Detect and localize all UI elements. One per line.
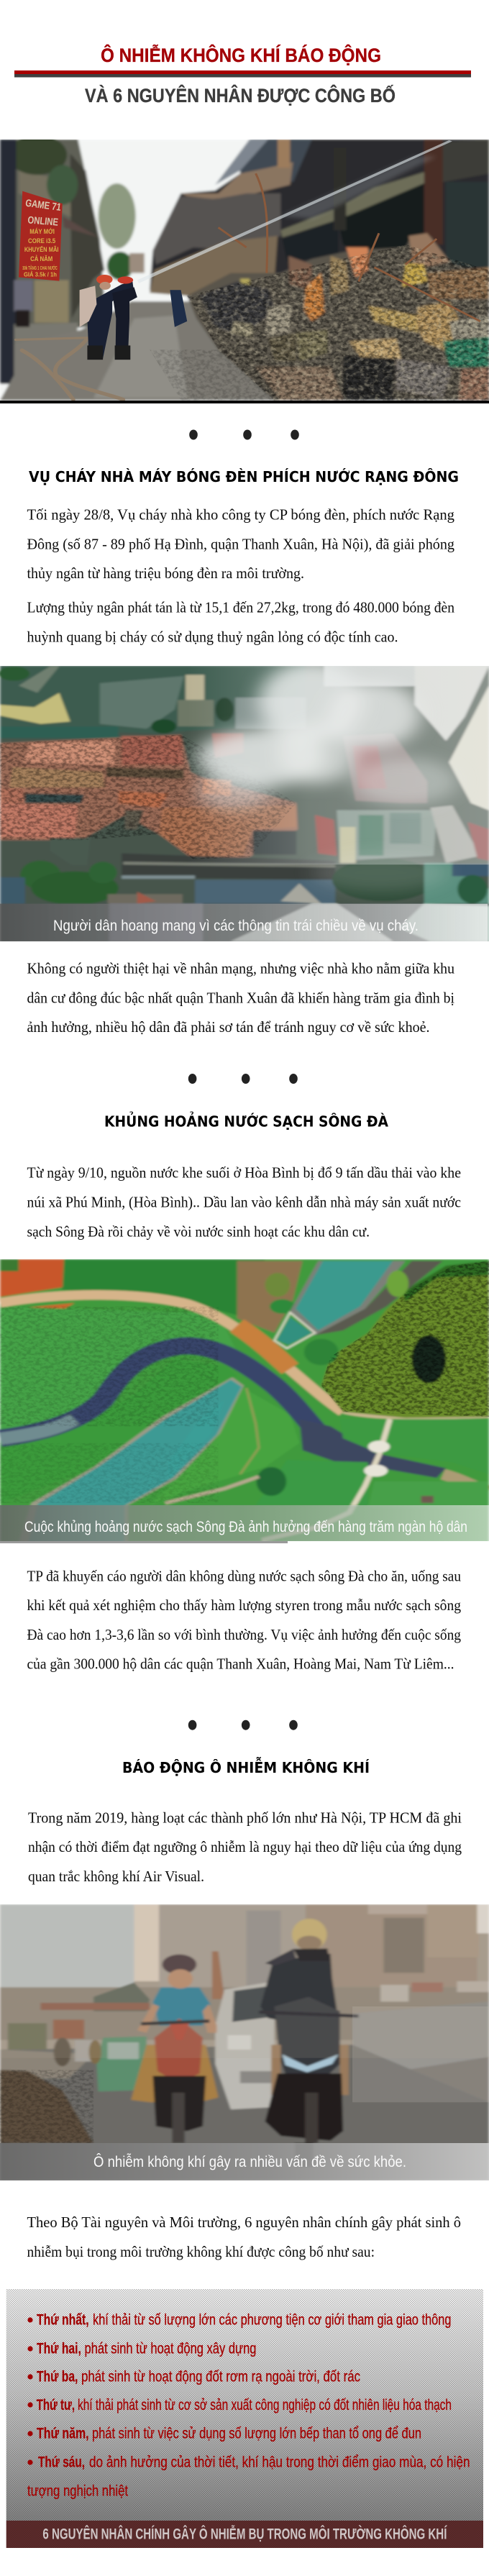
subtitle line: VÀ 6 NGUYÊN NHÂN ĐƯỢC CÔNG BỐ <box>85 83 396 106</box>
cause 2: phát sinh từ hoạt động xây dựng <box>85 2340 256 2357</box>
debris <box>187 236 489 401</box>
fire hoses <box>16 338 123 400</box>
under caption <box>0 904 489 942</box>
red sign with lettering: CORE i3.5 <box>28 237 56 245</box>
smog haze over background <box>0 1904 489 2058</box>
heading: factory fire: VỤ CHÁY NHÀ MÁY BÓNG ĐÈN PHÍCH NƯỚC RẠNG ĐÔNG <box>29 467 459 485</box>
roof texture <box>0 735 296 859</box>
paragraph: fire details: Đông (số 87 - 89 phố Hạ Đình, quận Thanh Xuân, Hà Nội), đã giải phóng <box>27 535 454 552</box>
rust struts <box>219 173 480 321</box>
red sign with lettering <box>19 191 63 281</box>
lower canal <box>19 1377 244 1542</box>
paragraph: six causes intro: Theo Bộ Tài nguyên và Môi trường, 6 nguyên nhân chính gây phát sinh ô <box>27 2214 461 2231</box>
factory shell <box>150 140 489 290</box>
road <box>0 301 280 401</box>
cause 3 <box>27 2369 360 2385</box>
title line: red: Ô NHIỄM KHÔNG KHÍ BÁO ĐỘNG <box>101 44 381 66</box>
caption: water crisis photo <box>0 1505 489 1541</box>
red sign with lettering: GAME 71 <box>24 197 62 214</box>
paragraph: air visual: Trong năm 2019, hàng loạt các thành phố lớn như Hà Nội, TP HCM đã ghi <box>28 1809 462 1826</box>
paragraph: no casualties: dân cư đông đúc bậc nhất quận Thanh Xuân đã khiến hàng trăm gia đình bị <box>27 989 454 1006</box>
left street buildings <box>16 140 106 336</box>
photo: firefighters spraying burnt factory <box>0 135 489 401</box>
cause 2: Thứ hai, <box>37 2340 81 2357</box>
caption: fire photo: Người dân hoang mang vì các thông tin trái chiều về vụ cháy. <box>53 918 419 934</box>
rider 1 <box>153 1987 211 2026</box>
burnt rust roofs <box>0 735 298 859</box>
cause 1: Thứ nhất, <box>37 2312 89 2329</box>
cause 6 <box>27 2454 470 2500</box>
paragraph: fire details: huỳnh quang bị cháy có sử dụng thuỷ ngân lỏng có độc tính cao. <box>27 628 398 645</box>
dam and walkway <box>262 1419 390 1540</box>
heading: air pollution alert: BÁO ĐỘNG Ô NHIỄM KHÔNG KHÍ <box>122 1756 370 1776</box>
mist overlay <box>187 666 489 864</box>
debris texture <box>187 245 489 401</box>
heading: water crisis: KHỦNG HOẢNG NƯỚC SẠCH SÔNG ĐÀ <box>104 1111 388 1131</box>
dots divider 3 <box>188 1720 298 1730</box>
paragraph: fire details: thủy ngân từ hàng triệu bóng đèn ra môi trường. <box>27 565 304 582</box>
photo bottom black line <box>0 401 489 403</box>
paragraph: no casualties <box>27 959 454 1036</box>
road <box>0 1295 343 1412</box>
firefighters <box>80 275 187 360</box>
cause 4: Thứ tư, <box>37 2397 75 2413</box>
cause 6: Thứ sáu, <box>38 2454 85 2471</box>
road and gravel <box>0 2045 489 2180</box>
paragraph: fire details: Lượng thủy ngân phát tán là từ 15,1 đến 27,2kg, trong đó 480.000 bóng đèn <box>27 599 454 616</box>
red sign with lettering: MÁY MỚI <box>29 227 55 236</box>
panel background halftone <box>6 2289 483 2521</box>
red sign with lettering: CẢ NĂM <box>30 255 52 263</box>
white van <box>215 1981 275 2109</box>
lower right fields <box>341 1418 439 1448</box>
red sign with lettering: 30k TẶNG 1 CHAI NƯỚC <box>22 265 58 271</box>
paragraph: air visual: quan trắc không khí Air Visual. <box>28 1868 204 1885</box>
panel footer band <box>6 2521 483 2548</box>
cause 5: Thứ năm, <box>37 2426 89 2442</box>
red sign with lettering: KHUYẾN MÃI <box>24 246 59 254</box>
water jet <box>137 140 452 283</box>
photo: motorbike riders in smog <box>0 1904 489 2180</box>
cause 3: Thứ ba, <box>37 2369 78 2385</box>
paragraph: water warning: của gần 300.000 hộ dân các quận Thanh Xuân, Hoàng Mai, Nam Từ Liêm... <box>27 1655 454 1673</box>
caption: smog photo: Ô nhiễm không khí gây ra nhiều vấn đề về sức khỏe. <box>93 2154 406 2170</box>
paragraph: six causes intro: nhiễm bụi trong môi trường không khí được công bố như sau: <box>27 2243 375 2260</box>
river <box>0 1346 331 1445</box>
fence <box>352 2002 489 2070</box>
water photo bottom fade strip <box>0 1541 288 1543</box>
cause 3: phát sinh từ hoạt động đốt rơm rạ ngoài trời, đốt rác <box>81 2369 360 2385</box>
upper canal <box>290 1261 406 1335</box>
caption: fire photo <box>0 904 488 941</box>
paragraph: six causes intro <box>27 2214 461 2260</box>
rider 2 <box>260 1953 338 2021</box>
paragraph: water warning <box>27 1567 461 1673</box>
title block <box>14 44 471 106</box>
panel: six causes <box>6 2289 483 2548</box>
cause 2 <box>27 2340 257 2357</box>
dots divider 1 <box>189 430 299 440</box>
paragraph: no casualties: ảnh hưởng, nhiều hộ dân đã phải sơ tán để tránh nguy cơ về sức khoẻ. <box>27 1018 430 1036</box>
photo: aerial river and canals <box>0 1259 489 1542</box>
red sign with lettering: ONLINE <box>27 214 59 229</box>
paragraph: fire details <box>27 506 454 645</box>
cause 6: tượng nghịch nhiệt <box>27 2483 128 2500</box>
dots divider 2 <box>188 1074 298 1084</box>
title rule: red and dark <box>14 70 471 78</box>
paragraph: oil spill: sạch Sông Đà rồi chảy về vòi nước sinh hoạt các khu dân cư. <box>27 1223 370 1240</box>
paragraph: air visual <box>28 1809 462 1885</box>
right side buildings <box>324 666 431 686</box>
smoke <box>196 662 459 892</box>
traffic <box>8 2023 47 2050</box>
foliage texture <box>321 1261 489 1417</box>
forest <box>321 1261 489 1418</box>
paragraph: oil spill: núi xã Phú Minh, (Hòa Bình).. Dầu lan vào kênh dẫn nhà máy sản xuất nước <box>27 1193 461 1210</box>
paragraph: fire details: Tối ngày 28/8, Vụ cháy nhà kho công ty CP bóng đèn, phích nước Rạng <box>27 506 454 524</box>
red sign with lettering: GIÁ 3.5k / 1h <box>24 271 57 278</box>
caption: smog photo <box>0 2143 489 2180</box>
lower roofs and trees <box>122 854 335 880</box>
paragraph: no casualties: Không có người thiệt hại về nhân mạng, nhưng việc nhà kho nằm giữa khu <box>27 959 454 977</box>
photo: aerial view of burnt factory <box>0 662 489 942</box>
paragraph: oil spill <box>27 1164 461 1240</box>
paragraph: oil spill: Từ ngày 9/10, nguồn nước khe suối ở Hòa Bình bị đổ 9 tấn dầu thải vào khe <box>27 1164 461 1182</box>
